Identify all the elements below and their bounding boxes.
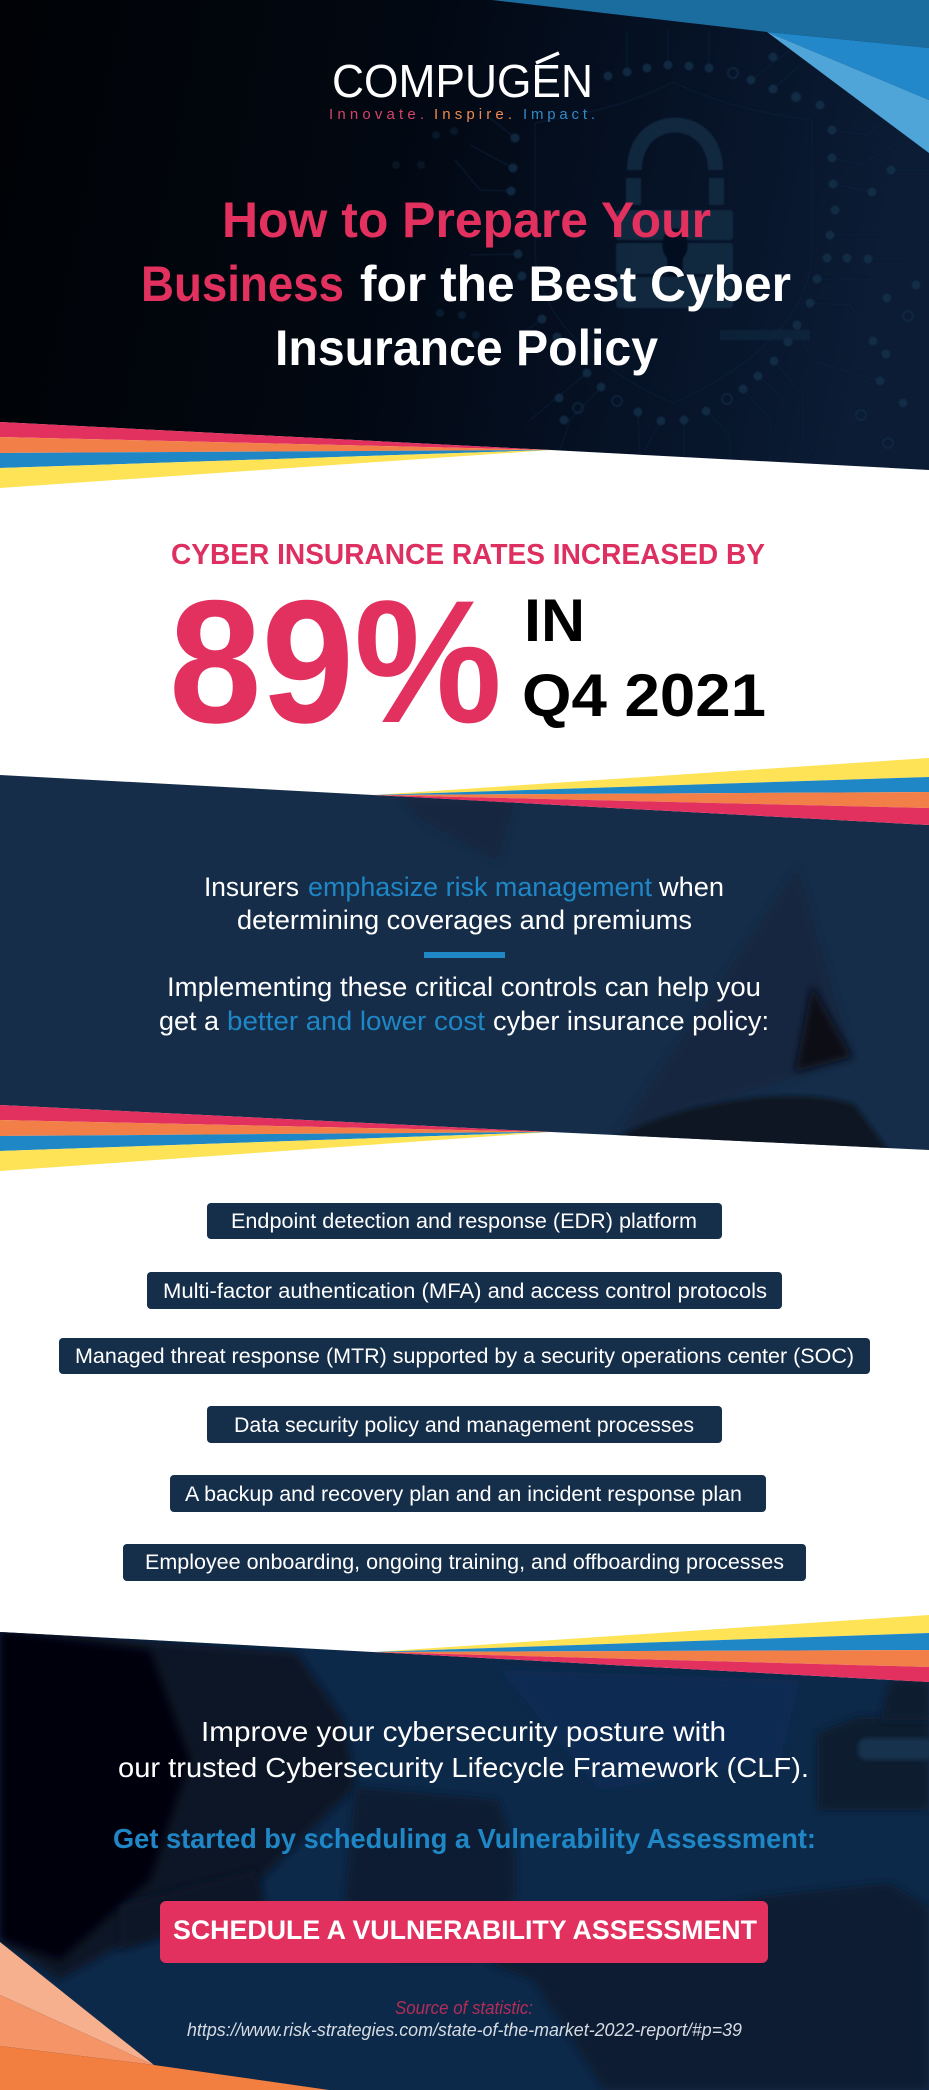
top right blue shards: [492, 0, 929, 153]
circuit and padlock backdrop: [392, 28, 929, 470]
colour stripes left: [0, 422, 551, 488]
text block: insurers: Insurers: [204, 872, 299, 902]
panel: hero header: [0, 0, 929, 488]
text block: implementing: get a: [159, 1006, 220, 1036]
text block: insurers: when: [658, 872, 724, 902]
control: MTR: Managed threat response (MTR) supported by a security operations center (SOC): [75, 1345, 854, 1368]
hero background: [0, 0, 929, 470]
button: schedule assessment: [160, 1901, 768, 1963]
logo tagline: Inspire.: [434, 106, 512, 123]
logo tagline: Impact.: [523, 106, 595, 123]
control: EDR: Endpoint detection and response (EDR) platform: [231, 1210, 697, 1233]
stat period: [522, 587, 766, 729]
control: MFA: [147, 1272, 782, 1309]
divider bar: [424, 952, 505, 958]
stat period: Q4 2021: [522, 662, 766, 729]
control: EDR: [207, 1203, 722, 1239]
logo: Compugen: COMPUGEN: [332, 55, 593, 107]
control: data security: Data security policy and management processes: [234, 1414, 694, 1437]
source citation: [187, 1998, 742, 2040]
title: Insurance Policy: [275, 320, 658, 376]
stat period: IN: [524, 587, 585, 654]
bottom left orange shards: [0, 1942, 329, 2090]
source citation: Source of statistic:: [395, 1998, 533, 2018]
section background with handshake silhouette: [0, 1625, 929, 2090]
button: schedule assessment: SCHEDULE A VULNERABILITY ASSESSMENT: [173, 1915, 757, 1945]
colour stripes right: [373, 758, 929, 825]
text block: insurers: [204, 872, 724, 935]
text block: improve posture: [118, 1716, 809, 1783]
colour stripes right: [373, 1615, 929, 1682]
stat: 89%: 89%: [169, 565, 502, 760]
panel: critical controls list: [59, 1203, 870, 1581]
text block: insurers: determining coverages and premiums: [237, 905, 692, 935]
text block: improve posture: our trusted Cybersecurity Lifecycle Framework (CLF).: [118, 1752, 809, 1783]
call to action heading: Get started by scheduling a Vulnerability Assessment:: [113, 1823, 816, 1854]
source citation: https://www.risk-strategies.com/state-of-the-market-2022-report/#p=39: [187, 2020, 742, 2040]
title: How to Prepare Your: [222, 192, 711, 248]
panel: risk management: [0, 758, 929, 1171]
icon: padlock: [616, 118, 810, 340]
control: employee processes: [123, 1544, 806, 1581]
logo tagline: Innovate.: [329, 106, 424, 123]
control: backup: A backup and recovery plan and an incident response plan: [185, 1483, 742, 1506]
text block: implementing: better and lower cost: [227, 1006, 486, 1036]
section background: [0, 770, 929, 1160]
control: employee processes: Employee onboarding, ongoing training, and offboarding processes: [145, 1551, 784, 1574]
control: data security: [207, 1406, 722, 1443]
panel: call to action: [0, 1615, 929, 2090]
logo tagline: [329, 106, 595, 123]
text block: implementing: [159, 972, 769, 1036]
text block: implementing: cyber insurance policy:: [493, 1006, 769, 1036]
title: for the Best Cyber: [360, 256, 791, 312]
panel: statistic: [169, 539, 766, 760]
text block: improve posture: Improve your cybersecurity posture with: [201, 1716, 726, 1747]
stat heading: CYBER INSURANCE RATES INCREASED BY: [171, 539, 765, 571]
text block: implementing: Implementing these critical controls can help you: [167, 972, 761, 1002]
text block: insurers: emphasize risk management: [308, 872, 652, 902]
control: MTR: [59, 1338, 870, 1374]
control: MFA: Multi-factor authentication (MFA) and access control protocols: [163, 1280, 767, 1303]
title: Business: [141, 256, 344, 312]
colour stripes left: [0, 1105, 551, 1171]
control: backup: [170, 1475, 766, 1512]
title: [141, 192, 791, 376]
